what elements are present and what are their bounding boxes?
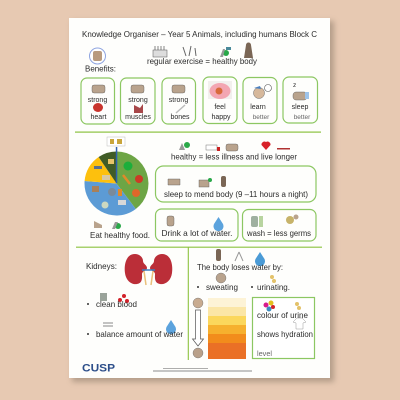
arrow: hydration scale bbox=[192, 298, 204, 358]
box: wash: wash = less germs bbox=[246, 229, 311, 238]
benefits heading: Benefits: bbox=[85, 64, 116, 74]
box: colour of urine: level bbox=[257, 349, 272, 358]
health sentence bbox=[171, 142, 297, 162]
benefit box: feel happy bbox=[203, 77, 237, 124]
benefit box: strong heart: heart bbox=[91, 114, 107, 121]
copyright note bbox=[153, 368, 252, 372]
water loss heading: The body loses water by: bbox=[197, 262, 283, 272]
benefit box: learn better: better bbox=[253, 114, 270, 121]
benefit box: sleep better: better bbox=[294, 114, 311, 121]
box: sleep bbox=[156, 166, 316, 202]
exercise sentence bbox=[147, 42, 258, 66]
bullet: urinating: urinating. bbox=[257, 282, 290, 292]
box: drink bbox=[156, 209, 238, 241]
exercise sentence: regular exercise = healthy body bbox=[147, 56, 258, 66]
box: colour of urine bbox=[252, 298, 314, 358]
benefit box: learn better: learn bbox=[250, 104, 266, 111]
panel: food and health bbox=[85, 137, 316, 241]
bullet: balance amount of water: balance amount of water bbox=[96, 329, 183, 339]
bullet: clean blood bbox=[87, 293, 137, 309]
divider: top bbox=[75, 132, 321, 133]
box: colour of urine: colour of urine bbox=[257, 310, 308, 320]
panel: water loss bbox=[192, 249, 314, 359]
food caption: Eat healthy food. bbox=[90, 230, 150, 240]
paper sheet bbox=[69, 18, 334, 382]
icon: healthy bbox=[112, 222, 121, 229]
box: wash bbox=[242, 210, 316, 241]
bullet: clean blood: clean blood bbox=[96, 299, 137, 309]
benefit box: strong bones: strong bbox=[169, 97, 188, 104]
panel: benefits bbox=[81, 42, 318, 124]
benefit box: sleep better: sleep bbox=[292, 104, 308, 111]
benefit box: feel happy: feel bbox=[214, 104, 226, 111]
benefit box: learn better bbox=[243, 78, 277, 124]
benefit box: strong heart: strong bbox=[88, 97, 107, 104]
box: drink: Drink a lot of water. bbox=[162, 228, 232, 238]
benefit box: strong muscles: muscles bbox=[125, 114, 151, 121]
logo: CUSP: CUSP bbox=[82, 362, 115, 374]
benefit box: strong heart bbox=[81, 78, 114, 124]
chart: urine colour scale bbox=[208, 298, 246, 359]
benefit box: strong bones: bones bbox=[170, 114, 190, 121]
divider: lower bbox=[76, 247, 322, 360]
benefit box: strong bones bbox=[162, 78, 196, 124]
icon: eat bbox=[94, 221, 102, 228]
title: Knowledge Organiser – Year 5 Animals, including humans Block C bbox=[82, 29, 317, 39]
health sentence: healthy = less illness and live longer bbox=[171, 152, 297, 162]
benefit box: strong muscles: strong bbox=[128, 97, 148, 104]
icon: thumbs up bbox=[90, 48, 106, 64]
bullet: balance amount of water bbox=[87, 320, 183, 339]
icon: kidneys bbox=[125, 254, 172, 285]
kidneys heading: Kidneys: bbox=[86, 261, 117, 271]
benefit box: sleep better: z bbox=[293, 82, 296, 89]
benefit box: feel happy: happy bbox=[211, 114, 231, 121]
bullet: sweating: sweating bbox=[206, 282, 238, 292]
benefit box: strong muscles bbox=[120, 78, 155, 124]
panel: kidneys bbox=[82, 254, 252, 374]
box: sleep: sleep to mend body (9 –11 hours a night) bbox=[164, 190, 308, 199]
box: colour of urine: shows hydration bbox=[257, 330, 313, 339]
benefit box: sleep better bbox=[283, 77, 318, 123]
chart: food plate pie bbox=[85, 137, 148, 215]
